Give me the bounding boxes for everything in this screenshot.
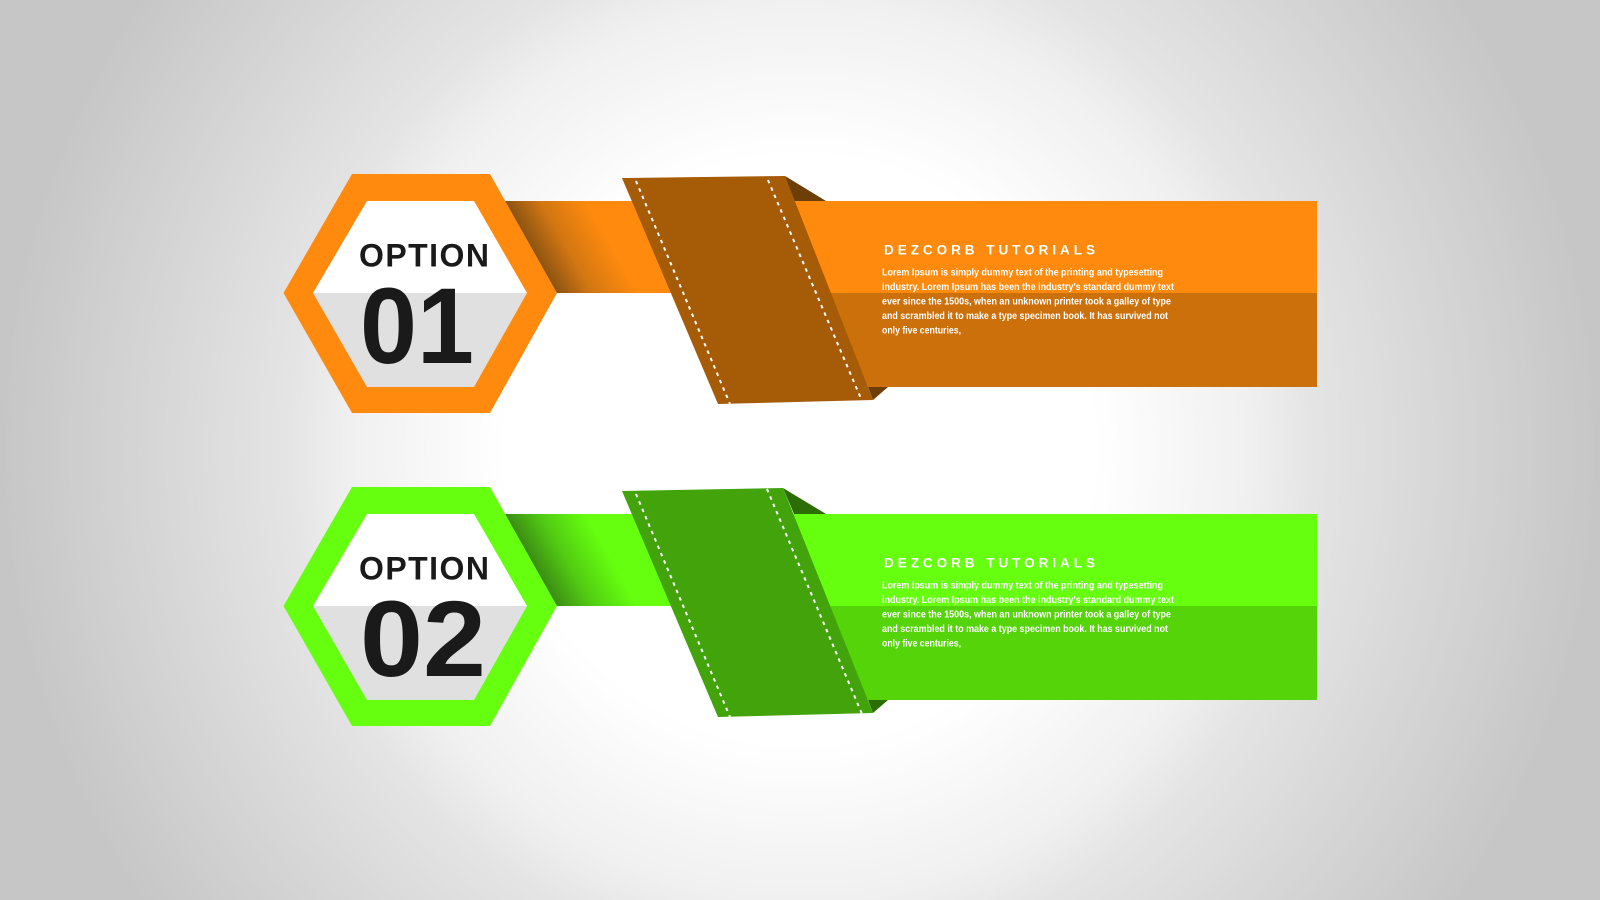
- band shadow gradient green: [500, 514, 660, 606]
- band lower green: [820, 606, 1317, 700]
- band upper orange: [500, 201, 1317, 293]
- heading 02: DEZCORB TUTORIALS: [884, 556, 1095, 570]
- fold panel green: [622, 488, 873, 717]
- option 02 row: [284, 487, 1317, 726]
- option 01 row: [284, 174, 1317, 413]
- band upper green: [500, 514, 1317, 606]
- body text 01: industry. Lorem Ipsum has been the industry's standard dummy text: [882, 281, 1174, 293]
- fold panel orange: [622, 176, 873, 404]
- body text 02: and scrambled it to make a type specimen book. It has survived not: [882, 623, 1168, 635]
- band shadow gradient orange: [500, 201, 660, 293]
- body text 01: only five centuries,: [882, 324, 961, 336]
- stitch left green: [636, 494, 730, 717]
- body text 02: ever since the 1500s, when an unknown printer took a galley of type: [882, 608, 1171, 620]
- label option 01: OPTION: [359, 238, 489, 274]
- body text 01: [882, 266, 1174, 336]
- fold bottom flap orange: [868, 387, 888, 400]
- body text 02: industry. Lorem Ipsum has been the industry's standard dummy text: [882, 594, 1174, 606]
- fold bottom flap green: [868, 700, 888, 713]
- body text 02: [882, 580, 1174, 650]
- body text 01: Lorem Ipsum is simply dummy text of the printing and typesetting: [882, 266, 1163, 278]
- body text 02: Lorem Ipsum is simply dummy text of the printing and typesetting: [882, 580, 1163, 592]
- fold top flap green: [783, 488, 826, 514]
- number 02: 02: [360, 578, 486, 699]
- stitch right orange: [768, 180, 862, 401]
- label option 02: OPTION: [359, 550, 489, 586]
- stitch right green: [767, 489, 862, 714]
- band lower orange: [820, 293, 1317, 387]
- body text 02: only five centuries,: [882, 638, 961, 650]
- stitch left orange: [636, 181, 730, 404]
- heading 01: DEZCORB TUTORIALS: [884, 242, 1095, 258]
- number 01: 01: [360, 265, 474, 386]
- body text 01: and scrambled it to make a type specimen book. It has survived not: [882, 310, 1168, 322]
- hexagon 01: [284, 174, 557, 413]
- hexagon 02: [284, 487, 557, 726]
- body text 01: ever since the 1500s, when an unknown printer took a galley of type: [882, 296, 1171, 308]
- fold top flap orange: [785, 176, 826, 201]
